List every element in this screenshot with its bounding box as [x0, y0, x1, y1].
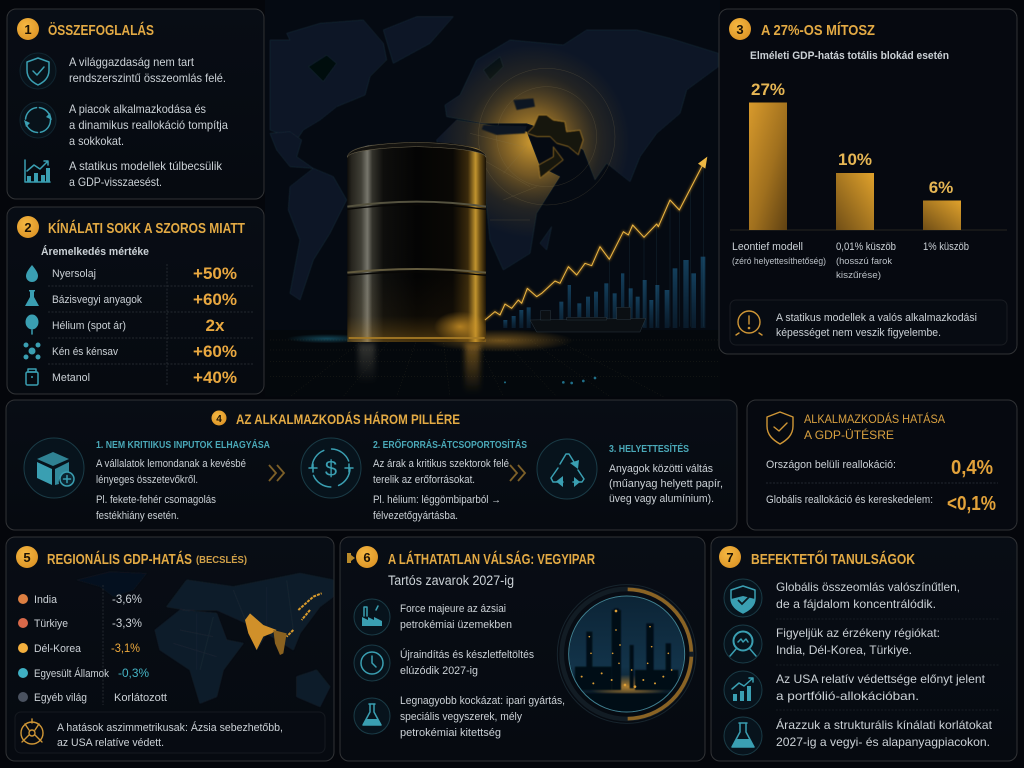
row: Kén és kénsav: +60%	[193, 342, 237, 361]
pillar 2: 2. ERŐFORRÁS-ÁTCSOPORTOSÍTÁS	[373, 438, 527, 451]
heading 6	[347, 546, 595, 568]
item: restart: elúzódik 2027-ig	[400, 665, 478, 677]
table dividers	[48, 264, 254, 386]
heading 5	[16, 546, 247, 568]
heading 1	[17, 18, 154, 40]
icon: target	[21, 719, 43, 744]
heading 6: 6	[363, 550, 371, 565]
row: Bázisvegyi anyagok: Bázisvegyi anyagok	[52, 294, 142, 306]
text: no collapse: A világgazdaság nem tart	[69, 55, 195, 69]
lesson 2	[724, 625, 940, 663]
bar: 10%	[836, 150, 874, 230]
heading 4: AZ ALKALMAZKODÁS HÁROM PILLÉRE	[236, 411, 460, 427]
pillar 1	[24, 438, 270, 522]
subheading: Tartós zavarok 2027-ig	[388, 573, 514, 588]
lesson 2: Figyeljük az érzékeny régiókat:	[776, 626, 940, 640]
pillar 3: 3. HELYETTESÍTÉS	[609, 442, 689, 455]
bar labels: 0,01% küszöb	[836, 241, 896, 253]
item: force majeure: Force majeure az ázsiai	[400, 603, 506, 615]
heading 4: 4	[216, 414, 222, 425]
lesson 4: 2027-ig a vegyi- és alapanyagpiacokon.	[776, 735, 990, 749]
heading 1: ÖSSZEFOGLALÁS	[48, 22, 154, 39]
legend row: Dél-Korea: Dél-Korea	[34, 643, 82, 655]
impact row 1: 0,4%	[951, 457, 993, 479]
pillar 1: 1. NEM KRITIIKUS INPUTOK ELHAGYÁSA	[96, 438, 270, 451]
legend row: Dél-Korea: -3,1%	[111, 641, 140, 655]
heading 5: 5	[23, 550, 31, 565]
pillar 1: festékhiány esetén.	[96, 510, 179, 522]
row: Nyersolaj: Nyersolaj	[52, 268, 96, 280]
central illustration: barrel, world map and price chart	[265, 0, 720, 397]
regional map	[77, 572, 333, 707]
callout: static models	[730, 300, 1007, 345]
row: Nyersolaj	[26, 264, 237, 283]
row: Hélium: 2x	[206, 316, 225, 335]
arrow 1	[269, 465, 284, 481]
lesson 4: Árazzuk a strukturális kínálati korlátokat	[776, 717, 993, 732]
floor grid	[265, 329, 720, 397]
callout: static models: A statikus modellek a valós alkalmazkodási	[776, 312, 977, 324]
panel 2: supply shock table	[7, 207, 264, 394]
pillar 3	[537, 439, 723, 505]
callout: asymmetry	[15, 712, 325, 753]
impact heading: ALKALMAZKODÁS HATÁSA	[804, 411, 945, 426]
heading 1: 1	[24, 22, 32, 37]
lesson 1: Globális összeomlás valószínűtlen,	[776, 580, 960, 594]
legend row: Egyéb világ: Korlátozott	[114, 692, 167, 704]
lesson 1: de a fájdalom koncentrálódik.	[776, 597, 936, 611]
impact row 1: Országon belüli reallokáció:	[766, 459, 896, 471]
rising price line with arrow	[485, 157, 707, 320]
row: Metanol	[26, 368, 237, 387]
bar: 6%	[923, 178, 961, 230]
legend row: Egyéb világ: Egyéb világ	[34, 692, 87, 704]
legend row: India	[18, 592, 142, 606]
item: restart: Újraindítás és készletfeltöltés	[400, 648, 534, 661]
legend row: Türkiye: Türkiye	[34, 618, 68, 630]
text: adaptation: A piacok alkalmazkodása és	[69, 102, 206, 116]
heading 3	[729, 18, 875, 40]
pillar 1: lényeges összetevőkről.	[96, 474, 198, 486]
panel 5: regional GDP impact	[6, 537, 334, 761]
panel 1: summary	[7, 9, 264, 199]
chart subtitle: Elméleti GDP-hatás totális blokád esetén	[750, 50, 949, 62]
text: static models	[69, 159, 223, 189]
row: Nyersolaj: +50%	[193, 264, 237, 283]
bar: 27%: 27%	[751, 80, 785, 99]
bar labels: Leontief modell	[732, 241, 803, 253]
bar labels	[732, 241, 969, 281]
pillar 2	[301, 438, 527, 522]
legend row: Dél-Korea	[18, 641, 140, 655]
heading 7: 7	[726, 550, 734, 565]
icon: box	[24, 438, 84, 498]
legend row: India: -3,6%	[112, 592, 142, 606]
table header: Áremelkedés mértéke	[41, 245, 149, 258]
text: adaptation: a sokkokat.	[69, 134, 124, 148]
lesson 3: Az USA relatív védettsége előnyt jelent	[776, 672, 986, 686]
legend row: Türkiye: -3,3%	[112, 616, 142, 630]
pillar 3: üveg vagy alumínium).	[609, 493, 714, 505]
heading 5: REGIONÁLIS GDP-HATÁS	[47, 551, 192, 568]
impact row 1	[766, 457, 993, 479]
bar: 10%: 10%	[838, 150, 872, 169]
bar labels: (zéró helyettesíthetőség)	[732, 256, 826, 267]
heading 3: 3	[736, 22, 744, 37]
impact row 2: <0,1%	[947, 493, 996, 515]
heading 7	[719, 546, 915, 568]
text: no collapse	[69, 55, 226, 85]
arrow 2	[510, 465, 525, 481]
heading 5: (BECSLÉS)	[196, 553, 247, 566]
legend row: Egyesült Államok: -0,3%	[118, 666, 149, 680]
legend row: India: India	[34, 594, 58, 606]
panel 7: investor lessons	[711, 537, 1017, 761]
row: Bázisvegyi anyagok	[25, 290, 237, 309]
lesson 3: a portfólió-allokációban.	[776, 689, 919, 703]
pillar 1: Pl. fekete-fehér csomagolás	[96, 494, 216, 506]
Gulf region silhouette	[527, 115, 583, 178]
bar labels: kiszűrése)	[836, 270, 881, 281]
cargo ship	[530, 307, 646, 332]
item: biggest risk: speciális vegyszerek, mély	[400, 711, 522, 723]
row: Metanol: Metanol	[52, 372, 90, 384]
icon: shield check	[767, 412, 793, 444]
pillar 2: terelik az erőforrásokat.	[373, 474, 475, 486]
icon: recycle	[537, 439, 597, 499]
lesson 1	[724, 579, 960, 617]
text: static models: A statikus modellek túlbecsülik	[69, 159, 223, 173]
icon: warning	[736, 311, 762, 335]
row: Bázisvegyi anyagok: +60%	[193, 290, 237, 309]
bar: 6%: 6%	[929, 178, 953, 197]
lesson 3	[724, 671, 986, 709]
heading 2	[17, 216, 245, 238]
impact row 2	[766, 493, 996, 515]
callout: static models: képességet nem veszik figyelembe.	[776, 327, 941, 339]
icon: cycle	[20, 102, 56, 138]
world map	[270, 17, 718, 300]
impact heading: A GDP-ÜTÉSRE	[804, 427, 894, 442]
bar: 27%	[749, 80, 787, 230]
icon: growth chart	[25, 160, 50, 182]
refinery image in ring	[557, 585, 696, 723]
panel 6: hidden crisis in chemicals	[340, 537, 705, 761]
bar chart	[730, 80, 1007, 230]
candlestick background	[503, 257, 705, 328]
icon: reallocation: $	[325, 456, 337, 481]
heading 3: A 27%-OS MÍTOSZ	[761, 22, 875, 39]
lesson 2: India, Dél-Korea, Türkiye.	[776, 643, 912, 657]
heading 2: 2	[24, 220, 32, 235]
row: Kén és kénsav	[24, 342, 237, 361]
item: force majeure	[354, 599, 512, 635]
pillar 2: Az árak a kritikus szektorok felé	[373, 458, 509, 470]
text: adaptation	[69, 102, 228, 148]
panel: adaptation impact on GDP	[747, 400, 1017, 530]
pillar 2: félvezetőgyártásba.	[373, 510, 458, 522]
pillar 2: Pl. hélium: léggömbiparból →	[373, 494, 501, 506]
legend row: Egyesült Államok	[18, 666, 149, 680]
text: no collapse: rendszerszintű összeomlás felé.	[69, 71, 226, 85]
panel 3: the 27% myth	[719, 9, 1017, 354]
item: biggest risk	[354, 695, 565, 739]
item: biggest risk: petrokémiai kitettség	[400, 727, 501, 739]
lesson 4	[724, 717, 993, 755]
callout: asymmetry: A hatások aszimmetrikusak: Ázsia sebezhetőbb,	[57, 721, 283, 734]
row: Hélium	[26, 314, 225, 335]
legend row: Egyéb világ	[18, 692, 167, 704]
icon: reallocation	[301, 438, 361, 498]
impact heading	[804, 411, 945, 442]
legend row: Türkiye	[18, 616, 142, 630]
row: Metanol: +40%	[193, 368, 237, 387]
impact row 2: Globális reallokáció és kereskedelem:	[766, 494, 933, 506]
heading 7: BEFEKTETŐI TANULSÁGOK	[751, 550, 915, 568]
text: static models: a GDP-visszaesést.	[69, 175, 162, 189]
icon: shield	[20, 53, 56, 89]
row: Hélium: Hélium (spot ár)	[52, 320, 126, 332]
row: Kén és kénsav: Kén és kénsav	[52, 346, 118, 358]
heading 6: A LÁTHATATLAN VÁLSÁG: VEGYIPAR	[388, 551, 595, 568]
bar labels: (hosszú farok	[836, 256, 892, 267]
item: biggest risk: Legnagyobb kockázat: ipari gyártás,	[400, 695, 565, 707]
pillar 3: Anyagok közötti váltás	[609, 463, 713, 475]
text: adaptation: a dinamikus reallokáció tompítja	[69, 118, 228, 132]
oil barrel	[347, 142, 486, 342]
bar labels: 1% küszöb	[923, 241, 969, 253]
item: restart	[354, 645, 534, 681]
heading 2: KÍNÁLATI SOKK A SZOROS MIATT	[48, 220, 245, 237]
item: force majeure: petrokémiai üzemekben	[400, 619, 512, 631]
pillar 1: A vállalatok lemondanak a kevésbé	[96, 458, 246, 470]
pillar 3: (műanyag helyett papír,	[609, 478, 723, 490]
panel 4: three pillars of adaptation	[6, 400, 737, 530]
callout: asymmetry: az USA relatíve védett.	[57, 737, 164, 749]
legend row: Egyesült Államok: Egyesült Államok	[34, 667, 109, 680]
